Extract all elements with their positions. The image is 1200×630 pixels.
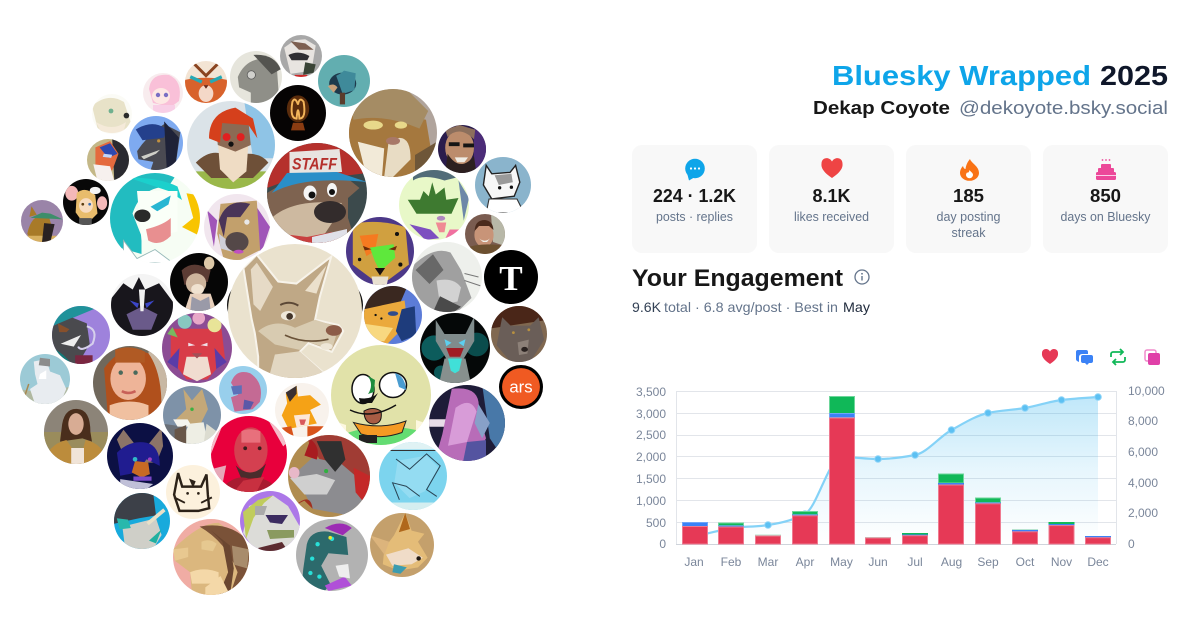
avatar: man — [465, 214, 505, 254]
month labels: Jun — [868, 555, 888, 569]
avatar: purple mountain — [52, 306, 110, 364]
avatar: tan coyote — [163, 386, 221, 444]
avatar: cap otter — [267, 143, 367, 243]
title: Bluesky Wrapped 2025: Bluesky Wrapped — [832, 60, 1091, 91]
profile name and handle — [813, 98, 1168, 118]
stat card: days on Bluesky — [1043, 145, 1168, 253]
right axis labels: 4,000 — [1128, 476, 1158, 490]
bar: Apr — [792, 512, 818, 544]
stat card: posting streak — [906, 145, 1031, 253]
engagement summary: 9.6K — [632, 299, 662, 315]
avatar: cap otter: STAFF — [292, 156, 338, 174]
icon: heart — [821, 158, 843, 178]
bar: Jul — [902, 533, 928, 544]
month labels: Mar — [758, 555, 778, 569]
avatar: green-white dog — [92, 94, 132, 134]
stat card: days on Bluesky: days on Bluesky — [1060, 210, 1151, 224]
stat card: posts and replies: 224 · 1.2K — [653, 186, 736, 206]
heading: Your Engagement: Your Engagement — [632, 265, 843, 292]
right axis labels: 6,000 — [1128, 445, 1158, 459]
left axis labels — [636, 385, 666, 551]
title: Bluesky Wrapped 2025 — [832, 60, 1168, 91]
avatar cluster — [20, 35, 547, 595]
stat card: posts and replies: posts · replies — [656, 210, 733, 224]
avatar: leopard — [346, 217, 414, 285]
bar: Oct — [1012, 529, 1038, 544]
icon: repost arrows — [1111, 349, 1125, 365]
icon: info — [855, 270, 869, 284]
month labels: Oct — [1016, 555, 1035, 569]
right axis labels: 2,000 — [1128, 506, 1158, 520]
engagement summary: May — [843, 299, 870, 315]
icon: replies bubbles — [1076, 350, 1093, 365]
avatar: fox mask — [87, 139, 129, 181]
month labels: Feb — [721, 555, 742, 569]
right axis labels: 10,000 — [1128, 384, 1165, 398]
avatar: green opossum — [240, 491, 300, 551]
avatar: yellow dog — [331, 345, 431, 445]
avatar: tan blue coyote — [364, 286, 422, 344]
bar: May — [830, 396, 854, 544]
left axis labels: 3,000 — [636, 407, 666, 421]
avatar: lynx — [166, 465, 220, 519]
bar: Jan — [682, 522, 708, 544]
cumulative line — [694, 397, 1098, 536]
avatar: ars logo: ars — [509, 378, 533, 397]
stat card: likes: 8.1K — [812, 186, 850, 206]
line points — [728, 394, 1101, 531]
avatar: red lion — [162, 312, 232, 383]
avatar: white cat on blue — [475, 157, 531, 213]
avatar: teal wolf — [420, 313, 490, 383]
avatar: black-white wolf — [111, 274, 173, 336]
month labels: Apr — [796, 555, 814, 569]
avatar: pink creature — [219, 366, 267, 414]
bar: Feb — [718, 523, 744, 544]
avatar: grey opossum — [288, 435, 370, 517]
icon: cake — [1096, 159, 1116, 180]
avatar: teal white critter — [110, 173, 200, 263]
avatar: blue sketch — [379, 442, 447, 510]
avatar: NYT: T — [499, 259, 523, 298]
left axis labels: 2,500 — [636, 428, 666, 442]
left axis labels: 500 — [646, 516, 666, 530]
avatar: bald man — [211, 416, 287, 492]
icon: flame — [960, 159, 979, 181]
cumulative area — [694, 397, 1098, 544]
avatar: black teal — [114, 493, 170, 549]
avatar: green leaf — [399, 170, 469, 240]
avatar edge: dark avatar behind the big coyote — [227, 263, 363, 347]
avatar: yellow mouse — [63, 179, 109, 225]
profile name and handle: @dekoyote.bsky.social — [959, 98, 1168, 118]
avatar: big coyote — [228, 244, 362, 380]
avatar: glasses man — [438, 125, 486, 173]
stat card: likes — [769, 145, 894, 253]
left axis labels: 3,500 — [636, 385, 666, 399]
bar: Nov — [1048, 522, 1074, 544]
stat card: posting streak: 185 — [953, 186, 984, 206]
right axis labels: 0 — [1128, 537, 1135, 551]
bar: Sep — [975, 498, 1001, 544]
bar: Dec — [1085, 536, 1111, 544]
avatar: grey lizard — [230, 51, 282, 103]
month labels — [684, 555, 1109, 569]
month labels: Aug — [941, 555, 962, 569]
avatar: red-haired woman — [93, 346, 167, 420]
left axis labels: 1,000 — [636, 494, 666, 508]
month labels: Dec — [1087, 555, 1109, 569]
avatar: otter cream — [349, 89, 437, 177]
icon: quote squares — [1145, 350, 1160, 365]
avatar: raccoon — [280, 35, 322, 77]
avatar: red fox — [187, 101, 275, 189]
avatar: teal dino — [296, 519, 368, 591]
avatar: white wolf — [20, 354, 70, 404]
stacked bars — [682, 396, 1111, 544]
avatar: fox tan — [370, 513, 434, 577]
avatar: blue dark horse — [129, 116, 183, 170]
avatar: brown mouse — [170, 253, 228, 311]
engagement summary: total · 6.8 avg/post · Best in — [664, 299, 838, 315]
avatar: hyena — [204, 194, 270, 260]
bar: Aug — [938, 474, 964, 544]
avatar: duck — [318, 55, 370, 107]
left axis labels: 1,500 — [636, 472, 666, 486]
month labels: Sep — [977, 555, 999, 569]
avatar: black blue fox — [107, 423, 173, 489]
avatar: hat critter — [21, 200, 63, 242]
avatar: grey wolf — [491, 306, 547, 362]
month labels: Jan — [684, 555, 704, 569]
avatar: lightbulb — [270, 85, 326, 141]
avatar: purple hair — [429, 385, 505, 461]
avatar: orange fox small — [275, 383, 329, 437]
month labels: Nov — [1051, 555, 1072, 569]
grid — [676, 391, 1116, 544]
avatar: grey sketch — [412, 242, 482, 312]
icon: speech bubble — [685, 159, 705, 180]
title: Bluesky Wrapped 2025: 2025 — [1100, 60, 1168, 91]
avatar: brunette — [44, 400, 108, 464]
bar: Jun — [865, 537, 891, 544]
avatar: tan lion — [173, 519, 249, 595]
stat card: posts and replies — [632, 145, 757, 253]
month labels: May — [830, 555, 853, 569]
month labels: Jul — [907, 555, 923, 569]
avatar: orange tiger — [185, 61, 227, 103]
stat card: likes: likes received — [794, 210, 869, 224]
left axis labels: 2,000 — [636, 450, 666, 464]
right axis labels — [1128, 384, 1165, 551]
avatar: pink girl — [143, 73, 183, 113]
chart legend — [1042, 349, 1160, 365]
profile name and handle: Dekap Coyote — [813, 98, 950, 118]
left axis labels: 0 — [659, 537, 666, 551]
avatar: ars logo — [499, 365, 543, 409]
combo chart: monthly engagement — [636, 384, 1165, 569]
right axis labels: 8,000 — [1128, 414, 1158, 428]
stat card: days on Bluesky: 850 — [1090, 186, 1121, 206]
icon: likes heart — [1042, 349, 1058, 364]
stat card: posting streak: streak — [952, 226, 986, 240]
bar: Mar — [755, 534, 781, 544]
avatar: NYT — [484, 250, 538, 304]
stat card: posting streak: day posting — [936, 210, 1001, 224]
